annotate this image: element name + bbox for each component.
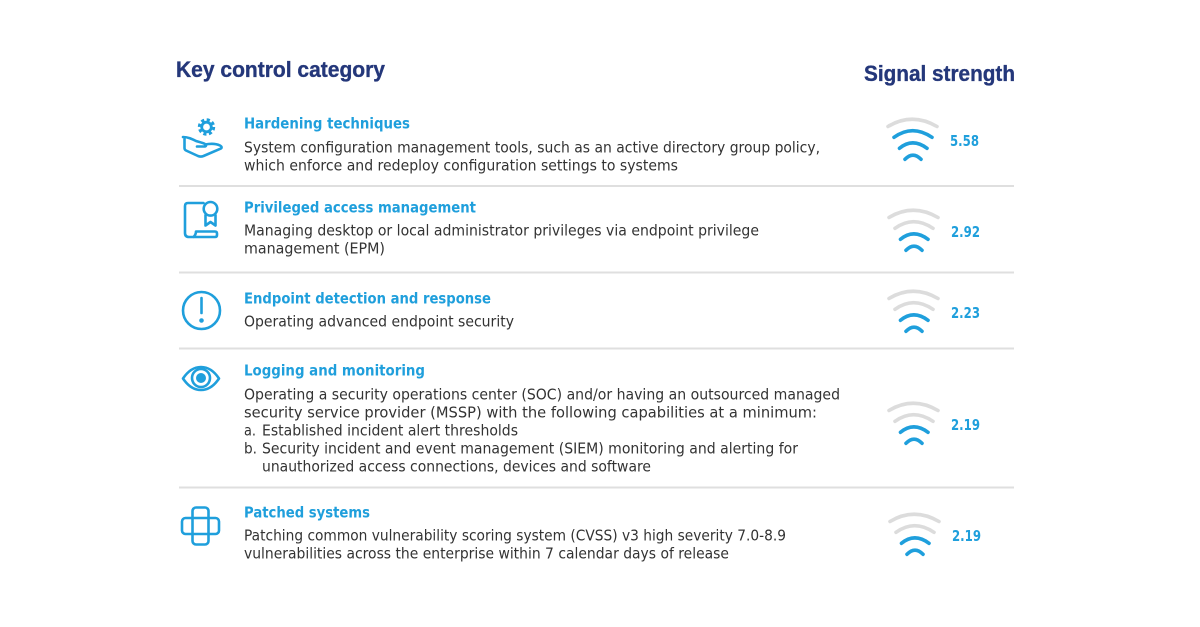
title: Patched systems [244,504,370,521]
description: Operating advanced endpoint security [244,312,514,330]
description: Security incident and event management (SIEM) monitoring and alerting for [262,439,799,457]
description [244,221,759,257]
value: 5.58 [950,133,979,150]
value: 2.92 [951,224,980,241]
signal icon: 2 of 4 [889,210,938,250]
row: privileged access management [185,199,980,257]
title: Endpoint detection and response [244,290,491,307]
row: endpoint detection and response [183,290,980,331]
title: Privileged access management [244,199,476,216]
icon: hand holding gear [183,120,222,157]
value: 2.23 [951,305,980,322]
description: Established incident alert thresholds [262,421,518,439]
icon: eye [183,367,219,390]
value: 2.19 [952,528,981,545]
description: Managing desktop or local administrator privileges via endpoint privilege [244,221,759,239]
description: security service provider (MSSP) with the following capabilities at a minimum: [244,403,817,421]
signal icon: 3 of 4 [888,119,937,159]
description: vulnerabilities across the enterprise within 7 calendar days of release [244,544,729,562]
title: Hardening techniques [244,115,410,132]
description: Patching common vulnerability scoring system (CVSS) v3 high severity 7.0-8.9 [244,526,786,544]
description [244,138,820,174]
description: a. [244,421,256,439]
row: hardening techniques [183,115,979,174]
value: 2.19 [951,417,980,434]
description: which enforce and redeploy configuration settings to systems [244,156,678,174]
signal icon: 2 of 4 [889,291,938,331]
description: management (EPM) [244,239,385,257]
icon: certificate book [185,202,217,237]
description [244,385,840,475]
signal icon: 2 of 4 [890,514,939,554]
description: unauthorized access connections, devices and software [262,457,651,475]
row: patched systems [182,504,981,562]
row: logging and monitoring [183,362,980,475]
description: Operating a security operations center (SOC) and/or having an outsourced managed [244,385,840,403]
icon: exclamation circle [183,292,220,329]
heading: key control category: Key control category [176,57,386,82]
icon: overlapping cross [182,508,219,544]
description: System configuration management tools, such as an active directory group policy, [244,138,820,156]
heading: signal strength: Signal strength [864,61,1015,86]
title: Logging and monitoring [244,362,425,379]
description: b. [244,439,257,457]
signal icon: 2 of 4 [889,403,938,443]
description [244,526,786,562]
